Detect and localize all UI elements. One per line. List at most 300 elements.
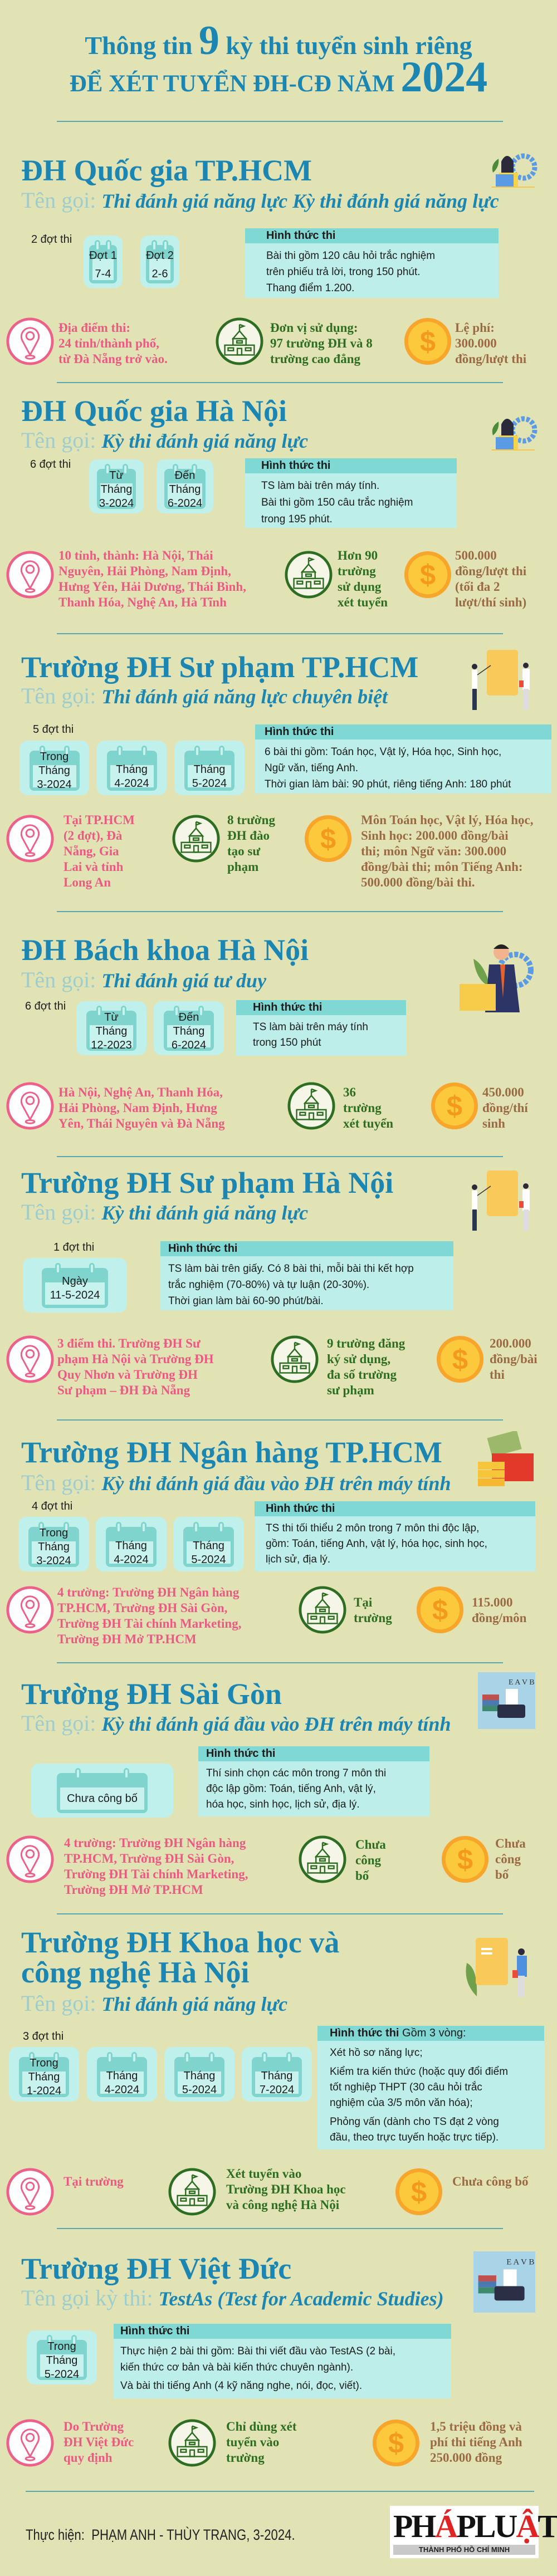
icon: coin xyxy=(416,1585,465,1634)
illustration: woman with laptop xyxy=(491,154,537,188)
box: TS làm bài trên máy tính xyxy=(253,1021,368,1033)
text: schools: Xét tuyển vào xyxy=(226,2167,301,2181)
text: fee xyxy=(455,548,526,609)
calendar to xyxy=(154,1001,224,1055)
text: fee xyxy=(455,321,526,366)
calendar 2 xyxy=(87,2047,157,2102)
icon: location xyxy=(6,2418,55,2467)
calendar 4: 7-2024 xyxy=(260,2084,294,2096)
box: hình thức thi: Thang điểm 1.200. xyxy=(266,282,354,294)
section 8: Trường ĐH Khoa học và công nghệ Hà Nội xyxy=(0,1918,557,2225)
text: location: Nẵng, Gia xyxy=(63,844,119,858)
box: hình thức thi: Hình thức thi xyxy=(266,229,335,242)
calendar from: Tháng xyxy=(96,1025,127,1037)
icon: school xyxy=(168,2167,217,2216)
text: schools: xét tuyển xyxy=(343,1116,393,1130)
icon: location xyxy=(6,1585,55,1634)
text: fee xyxy=(430,2419,522,2466)
calendar 1: 3-2024 xyxy=(37,778,72,791)
calendar 1: Trong xyxy=(40,751,69,763)
text: fee: 300.000 xyxy=(455,336,497,350)
calendar 3: Tháng xyxy=(184,2070,215,2082)
box: hình thức thi: trên phiếu trả lời, trong 150 phút. xyxy=(266,266,421,278)
name: Tên gọi: Thi đánh giá tư duy xyxy=(21,967,266,992)
text: schools xyxy=(354,1595,392,1626)
calendar to: Tháng xyxy=(169,483,201,496)
icon: location xyxy=(6,1335,55,1384)
calendar to: 6-2024 xyxy=(168,497,202,510)
text: schools: 8 trường xyxy=(227,813,275,827)
text: fee xyxy=(361,813,534,889)
box: TS làm bài trên giấy. Có 8 bài thi, mỗi bài thi kết hợp xyxy=(168,1263,414,1275)
text: schools: xét tuyển xyxy=(338,595,388,609)
box: độc lập gồm: Toán, tiếng Anh, vật lý, xyxy=(206,1783,376,1795)
box: Ngữ văn, tiếng Anh. xyxy=(265,762,358,774)
text: fee xyxy=(472,1595,526,1626)
box: Xét hồ sơ năng lực; xyxy=(330,2047,423,2059)
text: location: 24 tỉnh/thành phố, xyxy=(58,336,159,350)
text: schools: sử dụng xyxy=(338,580,381,594)
illustration: chart person xyxy=(466,1938,534,1999)
text: fee: Môn Toán học, Vật lý, Hóa học, xyxy=(361,813,534,827)
text: fee: 500.000 xyxy=(455,548,497,562)
box: Kiểm tra kiến thức (hoặc quy đổi điểm xyxy=(330,2066,508,2078)
text: location: Trường ĐH Mở TP.HCM xyxy=(64,1883,203,1897)
calendar 1: Tháng xyxy=(28,2071,60,2083)
calendar 2: Tháng xyxy=(116,763,148,776)
icon: location xyxy=(6,2167,55,2216)
text: fee: thi; môn Ngữ văn: 300.000 xyxy=(361,844,506,858)
illustration: typewriter: E A V B xyxy=(509,1678,535,1687)
text: schools: trường xyxy=(343,1101,382,1115)
text: fee: 115.000 xyxy=(472,1595,512,1609)
calendar 3 xyxy=(174,741,245,795)
text: location: Hải Phòng, Nam Định, Hưng xyxy=(58,1101,217,1115)
text: location: Trường ĐH Tài chính Marketing, xyxy=(64,1867,248,1881)
box: Hình thức thi Gồm 3 vòng: xyxy=(330,2027,466,2039)
heading xyxy=(21,1927,339,1987)
text: location: 4 trường: Trường ĐH Ngân hàng xyxy=(64,1836,246,1850)
heading: công nghệ Hà Nội xyxy=(21,1956,250,1989)
heading: Trường ĐH Việt Đức xyxy=(21,2252,291,2285)
icon: coin: $ xyxy=(447,1090,462,1122)
calendar xyxy=(31,1764,173,1818)
heading: ĐH Quốc gia Hà Nội xyxy=(21,394,287,428)
text: location: Lai và tỉnh xyxy=(63,860,123,874)
calendar from xyxy=(89,459,144,513)
calendar 2: 2-6 xyxy=(152,268,168,280)
text: schools xyxy=(270,321,373,366)
name: Tên gọi: Thi đánh giá năng lực xyxy=(21,1991,287,2016)
calendar from: Từ xyxy=(109,469,124,482)
box: Hình thức thi xyxy=(168,1242,237,1255)
text: fee: Chưa xyxy=(495,1836,526,1850)
text: schools: và công nghệ Hà Nội xyxy=(226,2198,339,2212)
calendar: 11-5-2024 xyxy=(50,1289,100,1301)
text: schools: Chỉ dùng xét xyxy=(226,2420,297,2433)
calendar to: Đến xyxy=(175,469,195,482)
text: fee xyxy=(482,1085,528,1130)
heading: Trường ĐH Ngân hàng TP.HCM xyxy=(21,1436,442,1469)
name: Tên gọi: Thi đánh giá năng lực Kỳ thi đánh giá năng lực xyxy=(21,188,499,213)
box: hóa học, sinh học, lịch sử, địa lý. xyxy=(206,1799,360,1810)
icon: location xyxy=(6,1835,55,1884)
calendar 1 xyxy=(84,236,123,288)
heading: Trường ĐH Khoa học và xyxy=(21,1926,339,1959)
text: schools: sư phạm xyxy=(327,1383,374,1397)
text: schools: 36 xyxy=(343,1085,356,1099)
box: TS làm bài trên máy tính. xyxy=(261,480,379,492)
box xyxy=(114,2324,451,2398)
text: fee: 200.000 xyxy=(490,1336,531,1350)
text: fee: thi xyxy=(490,1368,505,1382)
text: schools: trường xyxy=(354,1611,392,1625)
box: Hình thức thi xyxy=(261,459,330,472)
box: hình thức thi: Bài thi gồm 120 câu hỏi trắc nghiệm xyxy=(266,250,435,262)
calendar 1: Tháng xyxy=(38,1541,70,1553)
text: location: Yên, Thái Nguyên và Đà Nẵng xyxy=(58,1116,225,1130)
box: kiến thức cơ bản và bài kiến thức chuyên ngành). xyxy=(120,2362,353,2373)
icon: location xyxy=(7,815,53,862)
icon: school xyxy=(270,1335,319,1384)
calendar to: Tháng xyxy=(173,1025,204,1037)
text: fee: 450.000 xyxy=(482,1085,524,1099)
calendar 3 xyxy=(164,2047,234,2102)
logo: Pháp Luật xyxy=(390,2506,539,2558)
text: location: quy định xyxy=(63,2451,113,2465)
calendar 1: Tháng xyxy=(38,765,70,777)
text: schools: trường cao đẳng xyxy=(270,352,360,366)
text: fee: Sinh học: 200.000 đồng/bài xyxy=(361,829,509,843)
calendar 1: 7-4 xyxy=(95,268,111,280)
text: schools: Hơn 90 xyxy=(338,548,378,562)
heading: ĐH Bách khoa Hà Nội xyxy=(21,933,309,967)
text: location xyxy=(57,1336,214,1398)
illustration: businessman xyxy=(460,944,534,1012)
text: schools: trường xyxy=(338,564,376,578)
box: gồm: Toán, tiếng Anh, vật lý, hóa học, sinh học, xyxy=(266,1538,487,1550)
text: fee: đồng/bài xyxy=(490,1352,538,1366)
text: location: Hà Nội, Nghệ An, Thanh Hóa, xyxy=(58,1085,223,1099)
illustration: teachers xyxy=(472,1171,530,1231)
text: location: Do Trường xyxy=(63,2420,124,2433)
icon: coin xyxy=(394,2167,443,2216)
calendar from: 3-2024 xyxy=(99,497,134,510)
calendar to xyxy=(157,459,213,513)
text: location: ĐH Việt Đức xyxy=(63,2435,134,2449)
text: location: Trường ĐH Tài chính Marketing, xyxy=(57,1617,241,1630)
box xyxy=(255,1501,535,1571)
name: Tên gọi: Kỳ thi đánh giá đầu vào ĐH trên máy tính xyxy=(21,1711,451,1736)
text: fee: (tối đa 2 xyxy=(455,580,500,594)
icon: coin xyxy=(436,1335,485,1384)
calendar 3 xyxy=(173,1517,244,1571)
text: location xyxy=(58,548,246,609)
text: location: TP.HCM, Trường ĐH Sài Gòn, xyxy=(57,1601,227,1615)
calendar 4: Tháng xyxy=(261,2070,292,2082)
box: Hình thức thi xyxy=(206,1747,275,1760)
text: schools: Chưa xyxy=(355,1838,386,1852)
text: location: TP.HCM, Trường ĐH Sài Gòn, xyxy=(64,1852,234,1865)
illustration: money xyxy=(478,1431,536,1490)
icon: coin: $ xyxy=(411,2176,427,2208)
box: Hình thức thi xyxy=(120,2325,189,2337)
text: fee: 250.000 đồng xyxy=(430,2451,502,2465)
calendar 3: 5-2024 xyxy=(191,1554,226,1566)
box: Hình thức thi xyxy=(265,726,334,738)
text: fee: công xyxy=(495,1852,521,1866)
box: trắc nghiệm (70-80%) và tự luận (20-30%). xyxy=(168,1279,369,1291)
calendar 3: Tháng xyxy=(194,763,225,776)
text: schools: công xyxy=(355,1853,381,1867)
text: location: Quy Nhơn và Trường ĐH xyxy=(57,1368,198,1382)
icon: school xyxy=(285,551,332,598)
calendar 1: Trong xyxy=(40,1527,68,1539)
name: Tên gọi kỳ thi: TestAs (Test for Academic Studies) xyxy=(21,2285,444,2310)
box: Thời gian làm bài: 90 phút, riêng tiếng Anh: 180 phút xyxy=(265,778,511,790)
heading: Trường ĐH Sư phạm Hà Nội xyxy=(21,1166,393,1199)
calendar from: 12-2023 xyxy=(91,1039,132,1051)
icon: school xyxy=(287,1083,335,1129)
text: schools xyxy=(227,813,275,874)
box: tốt nghiệp THPT (30 câu hỏi trắc xyxy=(330,2082,482,2093)
heading: Trường ĐH Sài Gòn xyxy=(21,1677,282,1711)
heading: ĐH Quốc gia TP.HCM xyxy=(21,154,312,187)
calendar 3: Tháng xyxy=(193,1540,224,1552)
text: schools: tạo sư xyxy=(227,844,260,858)
text: fee: Lệ phí: xyxy=(455,321,495,335)
box xyxy=(198,1746,429,1816)
box xyxy=(317,2026,544,2149)
icon: coin: $ xyxy=(457,1844,473,1875)
text: schools: đa số trường xyxy=(327,1368,397,1382)
calendar: Tháng xyxy=(46,2354,77,2367)
text: fee: đồng/lượt thi xyxy=(455,352,526,366)
section 4: ĐH Bách khoa Hà Nội xyxy=(7,933,534,1130)
text: schools xyxy=(226,2419,297,2466)
calendar xyxy=(27,2330,97,2384)
box xyxy=(160,1241,453,1310)
calendar 2: Tháng xyxy=(106,2070,138,2082)
icon: school xyxy=(216,317,263,365)
calendar 2 xyxy=(97,741,167,795)
calendar to: 6-2024 xyxy=(172,1039,206,1051)
text: schools: bố xyxy=(355,1869,369,1883)
section 1: ĐH Quốc gia TP.HCM xyxy=(7,154,537,366)
calendar 2: Đợt 2 xyxy=(146,249,174,262)
name: Tên gọi: Kỳ thi đánh giá năng lực xyxy=(21,1199,308,1225)
calendar: Trong xyxy=(47,2340,76,2353)
box: Và bài thi tiếng Anh (4 kỹ năng nghe, nói, đọc, viết). xyxy=(120,2380,362,2392)
calendar 3: 5-2024 xyxy=(182,2084,217,2096)
title: Thông tin 9 kỳ thi tuyển sinh riêng xyxy=(85,18,472,63)
section 2: ĐH Quốc gia Hà Nội xyxy=(7,394,537,609)
text: fee: Chưa công bố xyxy=(452,2175,528,2188)
icon: location xyxy=(7,317,53,365)
icon: coin: $ xyxy=(420,559,436,591)
text: location xyxy=(64,1835,248,1898)
text: location xyxy=(63,2419,134,2466)
icon: coin xyxy=(441,1835,490,1884)
rounds: 3 đợt thi xyxy=(23,2030,63,2043)
calendar 2: Tháng xyxy=(115,1540,147,1552)
text: location xyxy=(63,813,135,889)
box: Phỏng vấn (dành cho TS đạt 2 vòng xyxy=(330,2116,499,2128)
calendar 1: Đợt 1 xyxy=(89,249,117,262)
illustration: typewriter xyxy=(473,2251,535,2313)
text: schools xyxy=(327,1336,405,1398)
icon: school xyxy=(298,1835,347,1884)
box: trong 195 phút. xyxy=(261,513,333,525)
text: schools: tuyển vào xyxy=(226,2435,279,2449)
text: fee xyxy=(495,1836,526,1883)
box xyxy=(236,1000,406,1056)
calendar: Chưa công bố xyxy=(67,1793,138,1805)
text: location: Tại trường xyxy=(63,2175,124,2188)
icon: location xyxy=(7,1083,53,1129)
text: fee: đồng/bài thi; môn Tiếng Anh: xyxy=(361,860,523,874)
section 7: Trường ĐH Sài Gòn xyxy=(0,1668,557,1907)
calendar 1: 1-2024 xyxy=(27,2085,61,2097)
text: schools xyxy=(343,1085,393,1130)
text: location: Thanh Hóa, Nghệ An, Hà Tĩnh xyxy=(58,595,227,609)
calendar 4 xyxy=(242,2047,312,2102)
text: schools: Đơn vị sử dụng: xyxy=(270,321,358,335)
logo: Pháp Luật: THÀNH PHỐ HỒ CHÍ MINH xyxy=(419,2545,510,2554)
calendar 1: 3-2024 xyxy=(36,1555,71,1567)
box: Thực hiện 2 bài thi gồm: Bài thi viết đầu vào TestAS (2 bài, xyxy=(120,2345,395,2357)
calendar 2: 4-2024 xyxy=(114,1554,149,1566)
text: location: Hưng Yên, Hải Dương, Thái Bình, xyxy=(58,580,246,594)
icon: coin xyxy=(404,318,451,365)
text: location: từ Đà Nẵng trở vào. xyxy=(58,352,168,366)
box: Hình thức thi xyxy=(253,1001,322,1013)
name: Tên gọi: Thi đánh giá năng lực chuyên biệt xyxy=(21,683,388,708)
text: location: 10 tỉnh, thành: Hà Nội, Thái xyxy=(58,548,213,562)
text: schools xyxy=(338,548,388,609)
box: Thí sinh chọn các môn trong 7 môn thi xyxy=(206,1767,386,1779)
text: fee: bố xyxy=(495,1868,509,1882)
section 9: Trường ĐH Việt Đức xyxy=(0,2233,557,2489)
text: location xyxy=(58,321,168,366)
text: fee: phí thi tiếng Anh xyxy=(430,2435,522,2449)
calendar: 5-2024 xyxy=(45,2368,79,2381)
text: fee: 1,5 triệu đồng và xyxy=(430,2420,522,2433)
box: nghiệm của 3/5 môn văn hóa); xyxy=(330,2097,473,2109)
heading: Trường ĐH Sư phạm TP.HCM xyxy=(21,650,418,684)
calendar 2: 4-2024 xyxy=(105,2084,139,2096)
box: trong 150 phút xyxy=(253,1037,321,1049)
calendar from: Từ xyxy=(104,1011,119,1023)
box: 6 bài thi gồm: Toán học, Vật lý, Hóa học, Sinh học, xyxy=(265,746,501,758)
text: schools: Tại xyxy=(354,1595,372,1609)
illustration: typewriter: E A V B xyxy=(506,2258,534,2267)
calendar 2 xyxy=(96,1517,167,1571)
text: schools: 97 trường ĐH và 8 xyxy=(270,336,373,350)
calendar 2: 4-2024 xyxy=(114,777,149,790)
calendar 2 xyxy=(140,236,179,288)
text: fee: 500.000 đồng/bài thi. xyxy=(361,875,475,889)
section 5: Trường ĐH Sư phạm Hà Nội xyxy=(7,1166,538,1397)
name: Tên gọi: Kỳ thi đánh giá đầu vào ĐH trên máy tính xyxy=(21,1470,451,1495)
calendar 1 xyxy=(18,1517,89,1571)
section 6: Trường ĐH Ngân hàng TP.HCM xyxy=(0,1426,557,1659)
calendar xyxy=(23,1258,127,1313)
icon: coin xyxy=(304,815,352,862)
illustration: typewriter xyxy=(478,1672,535,1729)
calendar to: Đến xyxy=(179,1011,199,1023)
calendar 1: Trong xyxy=(30,2057,58,2069)
box: Bài thi gồm 150 câu trắc nghiệm xyxy=(261,497,413,508)
calendar from xyxy=(76,1001,146,1055)
box: TS thi tối thiểu 2 môn trong 7 môn thi độc lập, xyxy=(266,1522,479,1534)
rounds: 4 đợt thi xyxy=(32,1500,72,1512)
text: fee: đồng/lượt thi xyxy=(455,564,526,578)
icon: coin: $ xyxy=(432,1594,448,1626)
illustration: teachers xyxy=(472,650,530,710)
text: location: phạm Hà Nội và Trường ĐH xyxy=(57,1352,214,1366)
footer credit: Thực hiện: PHẠM ANH - THÙY TRANG, 3-2024. xyxy=(26,2526,295,2543)
text: location: Sư phạm – ĐH Đà Nẵng xyxy=(57,1383,190,1397)
box xyxy=(255,724,551,794)
rounds: 1 đợt thi xyxy=(53,1241,94,1253)
icon: coin xyxy=(404,551,451,598)
box: đầu, theo trực tuyến hoặc trực tiếp). xyxy=(330,2132,499,2143)
text: location: Tại TP.HCM xyxy=(63,813,135,827)
text: schools: ĐH đào xyxy=(227,829,270,843)
logo: Pháp Luật: PHÁPLUẬT xyxy=(393,2508,557,2544)
icon: coin xyxy=(431,1083,478,1129)
section 3: Trường ĐH Sư phạm TP.HCM xyxy=(7,650,551,889)
calendar from: Tháng xyxy=(101,483,132,496)
icon: location xyxy=(7,551,53,598)
box xyxy=(245,458,457,528)
text: schools: trường xyxy=(226,2451,265,2465)
text: fee xyxy=(490,1336,538,1383)
text: schools: ký sử dụng, xyxy=(327,1352,390,1366)
rounds: 6 đợt thi xyxy=(25,1000,66,1012)
text: fee: đồng/thí xyxy=(482,1101,528,1115)
calendar 1 xyxy=(19,741,89,795)
box: hình thức thi xyxy=(245,228,499,298)
text: schools: phạm xyxy=(227,860,258,874)
illustration xyxy=(491,417,537,450)
text: location xyxy=(57,1585,241,1647)
text: location: (2 đợt), Đà xyxy=(63,829,122,843)
box: Hình thức thi xyxy=(266,1502,335,1515)
text: schools xyxy=(355,1837,386,1884)
icon: coin: $ xyxy=(420,326,436,357)
text: location: 4 trường: Trường ĐH Ngân hàng xyxy=(57,1585,239,1599)
rounds: 2 đợt thi xyxy=(31,233,72,246)
name: Tên gọi: Kỳ thi đánh giá năng lực xyxy=(21,428,308,453)
text: location: 3 điểm thi. Trường ĐH Sư xyxy=(57,1336,201,1350)
box: lịch sử, địa lý. xyxy=(266,1554,330,1565)
text: location: Long An xyxy=(63,875,111,889)
text: location xyxy=(58,1085,225,1130)
icon: coin: $ xyxy=(320,823,336,855)
text: schools xyxy=(226,2166,346,2213)
text: schools: 9 trường đăng xyxy=(327,1336,405,1350)
box: Thời gian làm bài 60-90 phút/bài. xyxy=(168,1295,324,1307)
text: fee: lượt/thí sinh) xyxy=(455,595,526,609)
text: fee: sinh xyxy=(482,1116,505,1130)
text: location: Địa điểm thi: xyxy=(58,321,130,335)
icon: coin: $ xyxy=(388,2427,404,2459)
icon: school xyxy=(298,1585,347,1634)
text: location: Nguyên, Hải Phòng, Nam Định, xyxy=(58,564,231,578)
icon: school xyxy=(172,815,219,862)
